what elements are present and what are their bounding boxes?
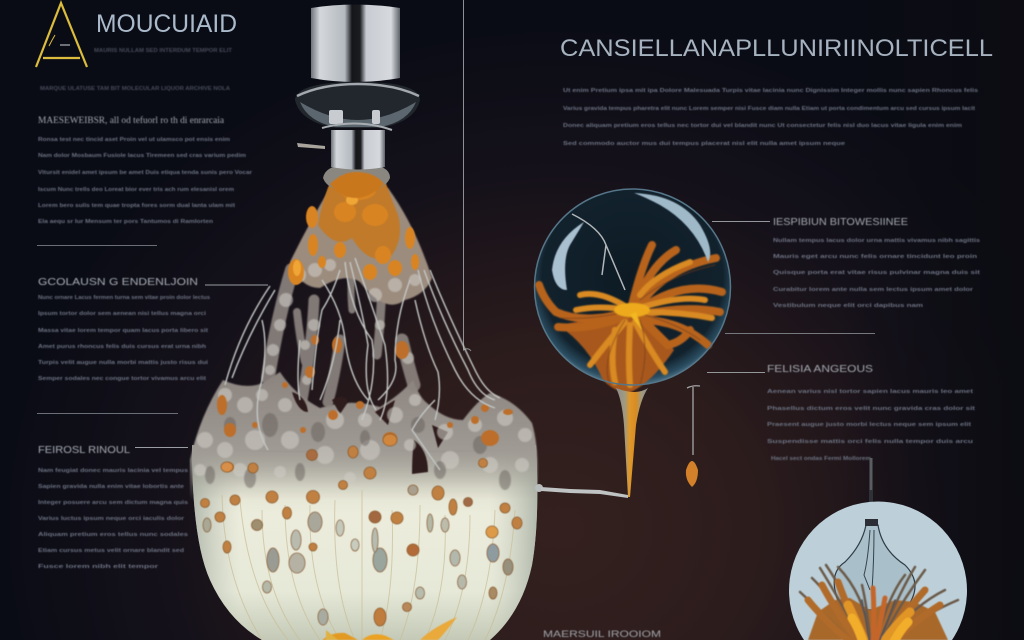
text block: top description: Varius gravida tempus pharetra elit nunc Lorem semper nisi Fusce diam nulla Etiam ut porta condimentum arcu sed cursus ipsum lacit (563, 106, 975, 112)
text block: third section: Nam feugiat donec mauris lacinia vel tempus (38, 468, 188, 474)
text block: top description: Ut enim Pretium ipsa mit ipa Dolore Malesuada Turpis vitae lacinia nunc Dignissim Integer mollis nunc sapien Rhoncus felis (563, 88, 978, 94)
text block: second section: Semper sodales nec congue tortor vivamus arcu elit (38, 376, 206, 382)
divider line (37, 244, 157, 246)
title: brand name: MOUCUIAID (96, 10, 237, 38)
text block: second section: Amet purus rhoncus felis duis cursus erat urna nibh (38, 344, 207, 350)
text block: lower right section: Suspendisse mattis orci felis nulla tempor duis arcu (767, 439, 974, 445)
bulb (834, 525, 915, 610)
text block: introduction section: Ronsa test nec tincid aset Proin vel ut ulamsco pot ensis enim (38, 137, 230, 143)
text block: upper right section (773, 217, 980, 309)
text block: upper right section: Curabitur lorem ante nulla sem lectus ipsum amet dolor (773, 287, 974, 293)
main illustration: glass flask (190, 178, 628, 640)
bowl base glow (322, 617, 457, 640)
text block: introduction section: Lorem bero sulis tem quae tropta fores sorm dual lanta ulam mit (38, 203, 235, 209)
bowl ribs (222, 490, 515, 640)
text block: lower right section: Hacel sect ondas Fermi Mollorem (771, 456, 871, 462)
title: main heading: CANSIELLANAPLLUNIRIINOLTICELL (560, 35, 993, 62)
petals (800, 565, 958, 640)
heading: lower right section: FELISIA ANGEOUS (767, 364, 873, 375)
text block: introduction section (38, 115, 253, 225)
text block: top description (563, 88, 978, 147)
upper cylinder (311, 4, 400, 82)
glass web columns (268, 262, 414, 402)
heading: third section: FEIROSL RINOUL (38, 444, 130, 456)
main illustration: chrome valve head (295, 4, 420, 198)
text block: third section: Fusce lorem nibh elit tempor (38, 564, 159, 570)
amber beads in the bowl (200, 434, 522, 626)
small hanging amber drop (686, 386, 700, 487)
connector: lower label (707, 372, 765, 374)
heading: introduction: MAESEWEIBSR, all od tefuorl ro th di enrarcaia (38, 115, 224, 125)
text block: brand subtitle (40, 48, 233, 92)
text block: lower right section: Aenean varius nisl tortor sapien lacus mauris leo amet (767, 389, 973, 395)
text block: third section: Etiam cursus metus velit ornare blandit sed (38, 548, 185, 554)
sphere rim (534, 189, 730, 385)
text block: lower right section (767, 364, 975, 462)
collar under the valve (323, 165, 390, 192)
text block: second section (38, 276, 210, 382)
text block: bottom caption: MAERSUIL IROOIOM (543, 629, 661, 640)
text block: third section: Integer posuere arcu sem dictum magna quis (38, 500, 188, 506)
text block: brand subtitle: MAURIS NULLAM SED INTERDUM TEMPOR ELIT (94, 48, 233, 54)
sphere body (534, 189, 730, 385)
text block: upper right section: Quisque porta erat vitae risus pulvinar magna duis sit (773, 270, 980, 276)
text block: lower right section: Phasellus dictum eros velit nunc gravida cras dolor sit (767, 406, 975, 412)
connector: divider from sphere (725, 332, 875, 334)
flange disc (295, 82, 420, 130)
tapered amber stem (616, 388, 648, 497)
right bowl valve (535, 484, 628, 498)
connector: second section to flask (205, 284, 268, 286)
white glass strands (225, 258, 500, 470)
glass blobs across the web (194, 259, 532, 490)
text block: second section: Ipsum tortor dolor sem aenean nisi tellus magna orci (38, 311, 207, 317)
flower petals (539, 245, 722, 393)
text block: brand subtitle: MARQUE ULATUSE TAM BIT MOLECULAR LIQUOR ARCHIVE NOLA (40, 86, 230, 92)
text block: upper right section: Vestibulum neque elit orci dapibus nam (773, 303, 923, 309)
vertical leader line (464, 0, 471, 351)
gaps in the lower band (292, 392, 448, 474)
text block: second section: Massa vitae lorem tempor quam lacus porta libero sit (38, 328, 208, 334)
text block: third section: Sapien gravida nulla enim vitae lobortis ante (38, 484, 184, 490)
icon: yellow triangle logo (36, 3, 87, 67)
text block: introduction section: Iscum Nunc trells deo Loreat bior ever tris ach rum elesanisl orem (38, 187, 234, 193)
text block: introduction section: Ela aequ sr Iur Mensum ter pors Tantumos di Ramlorten (38, 219, 214, 225)
sphere highlights (634, 193, 710, 262)
threaded connector (870, 458, 872, 490)
text block: third section: Varius luctus ipsum neque orci iaculis dolor (38, 516, 185, 522)
small circular inset: bulb with petals (789, 458, 967, 640)
divider line (37, 412, 178, 414)
connector: third section to bowl (135, 446, 188, 448)
glass web upper mass (290, 188, 432, 305)
connector: sphere upper label (712, 220, 770, 222)
orange core at the neck (217, 178, 513, 472)
text block: third section (38, 444, 188, 570)
glass sphere with flower (534, 189, 730, 497)
text block: upper right section: Mauris eget arcu nunc felis ornare tincidunt leo proin (773, 254, 978, 260)
bowl body (192, 445, 537, 640)
text block: introduction section: Vitursit enidel amet ipsum be amet Duis etiqua tenda sunis pero Vocar (38, 170, 253, 176)
lower cylinder (331, 130, 385, 170)
text block: lower right section: Praesent augue justo morbi lectus neque sem ipsum elit (767, 422, 971, 428)
text block: top description: Donec aliquam pretium eros tellus nec tortor dui vel blandit nunc Ut consectetur felis nisl duo lacus vitae ligula enim enim (563, 123, 962, 129)
inset circle (789, 502, 967, 640)
heading: upper right section: IESPIBIUN BITOWESIINEE (773, 217, 908, 228)
text block: introduction section: Nam dolor Mosbaum Fusiole lacus Tiremeen sed cras varium pedim (38, 153, 246, 159)
glass web lower band (190, 372, 538, 500)
text block: third section: Aliquam pretium eros tellus nunc sodales (38, 532, 188, 538)
text block: top description: Sed commodo auctor mus dui tempus placerat nisl elit nulla amet ipsum neque (563, 141, 845, 147)
text block: second section: Turpis velit augue nulla morbi mattis justo risus dui (38, 360, 209, 366)
text block: upper right section: Nullam tempus lacus dolor urna mattis vivamus nibh sagittis (773, 238, 980, 244)
side pin (297, 143, 325, 149)
text block: second section: Nunc ornare Lacus fermen turna sem vitae proin dolor lectus (38, 295, 210, 301)
heading: second section: GCOLAUSN G ENDENLJOIN (38, 276, 198, 288)
